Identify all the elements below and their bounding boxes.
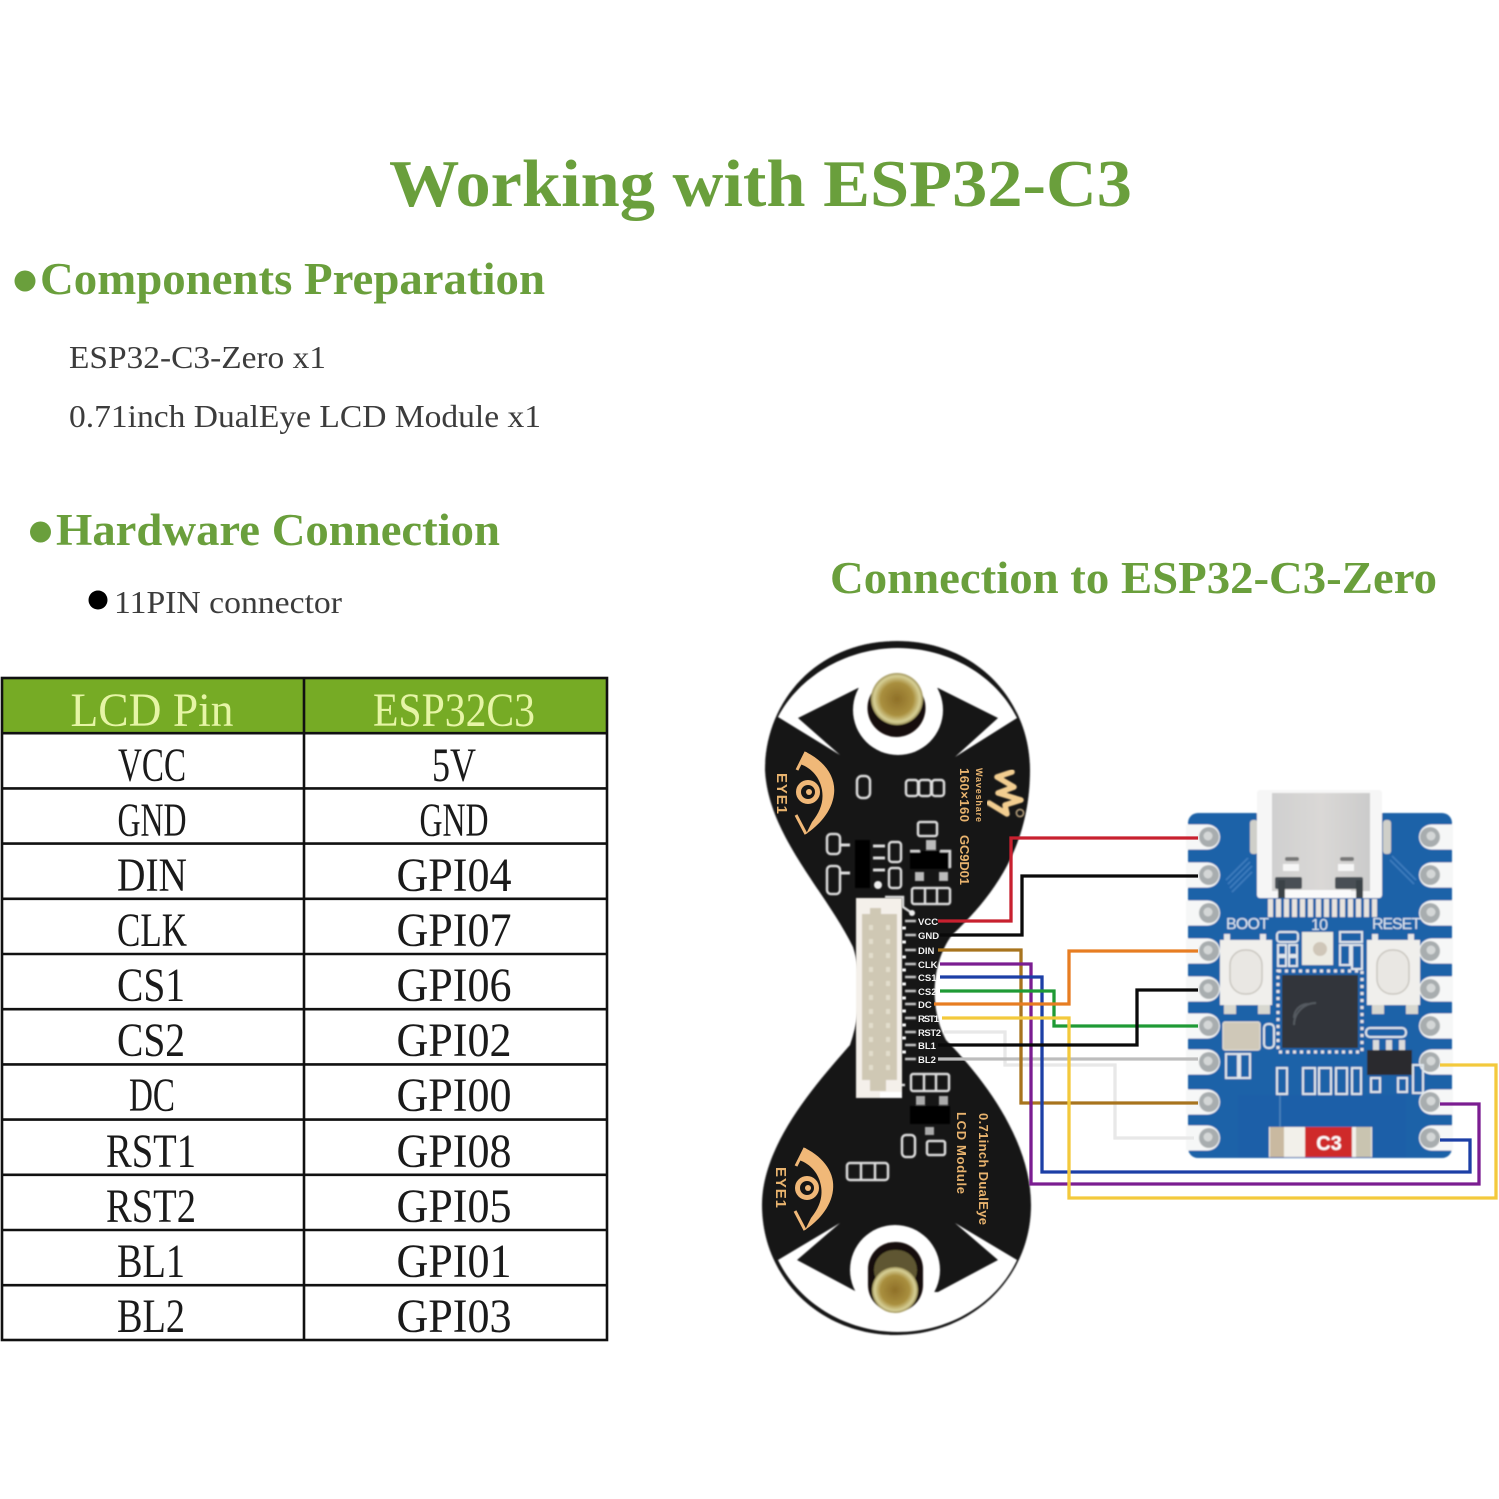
table body text: GPI02 — [396, 1014, 512, 1067]
heading: connection to ESP32-C3-Zero: Connection to ESP32-C3-Zero — [830, 553, 1437, 603]
wire: CS1 — [940, 977, 1470, 1172]
table body text — [106, 739, 512, 1343]
table body text: GPI04 — [396, 849, 512, 902]
table header row: LCD Pin — [70, 684, 234, 737]
text block: component list: ESP32-C3-Zero x1 — [69, 339, 326, 375]
table body text: CS2 — [117, 1014, 185, 1067]
LCD module board — [762, 641, 1031, 1335]
small pcb footprints — [1226, 932, 1423, 1094]
pin labels: GND — [918, 931, 939, 942]
pin labels — [902, 917, 941, 1066]
PCB base — [1188, 813, 1452, 1158]
ESP32-C3 chip — [1278, 971, 1362, 1052]
table body text: CLK — [117, 904, 187, 957]
table body text: DIN — [117, 849, 187, 902]
table body text: GPI08 — [396, 1125, 512, 1178]
USB-C connector — [1250, 790, 1391, 908]
icon: bottom eye logo — [795, 1148, 833, 1230]
table body text: GPI01 — [396, 1235, 512, 1288]
top screw — [868, 673, 926, 737]
label: EYE1 top: EYE1 — [773, 773, 790, 814]
silk labels: BOOT — [1226, 916, 1269, 933]
pin labels: CS2 — [918, 987, 936, 998]
pin labels: BL1 — [918, 1041, 937, 1052]
table: pin mapping — [2, 678, 607, 1343]
antenna area — [1238, 1095, 1406, 1158]
table body text: RST2 — [106, 1180, 196, 1233]
BOOT button — [1220, 934, 1272, 1014]
board footprints — [827, 776, 950, 1180]
heading: hardware connection: Hardware Connection — [56, 505, 500, 555]
table body text: GPI06 — [396, 959, 512, 1012]
table header row — [2, 678, 607, 737]
text block: component list — [69, 339, 541, 434]
pin labels: RST2 — [918, 1028, 941, 1039]
silk labels: 10 — [1311, 917, 1328, 934]
pin labels: DC — [918, 1000, 932, 1011]
wire: RST2 — [944, 1032, 1194, 1138]
wire: DIN — [938, 950, 1198, 1103]
connection wires — [934, 838, 1496, 1198]
board outline — [762, 641, 1031, 1335]
wire: GND — [940, 876, 1198, 935]
silk labels — [1226, 916, 1421, 934]
wire: CS2 — [940, 991, 1198, 1026]
22-pin connector — [856, 898, 902, 1098]
pin labels: BL2 — [918, 1055, 936, 1066]
wire: BL1 — [938, 990, 1198, 1045]
wire: DC — [934, 951, 1198, 1004]
antenna area: C3 — [1316, 1133, 1342, 1155]
board silk text: 160×160 — [957, 768, 972, 822]
text block: 11PIN connector: 11PIN connector — [114, 584, 342, 620]
table body text: CS1 — [117, 959, 185, 1012]
table body text: 5V — [432, 739, 476, 792]
wire: BL2 — [938, 1057, 1198, 1061]
ESP32-C3-Zero board — [1186, 790, 1453, 1158]
board silk text — [954, 768, 991, 1225]
wire: CLK — [940, 964, 1479, 1184]
pin labels: CLK — [918, 960, 938, 971]
label: EYE1 bottom: EYE1 — [772, 1167, 789, 1208]
side pads — [1186, 824, 1453, 1150]
crystal — [1223, 1022, 1260, 1050]
table body text: GPI07 — [396, 904, 512, 957]
board silk text: LCD Module — [954, 1112, 969, 1194]
board silk text: GC9D01 — [957, 835, 972, 885]
table body text: RST1 — [106, 1125, 196, 1178]
pin labels: CS1 — [918, 973, 937, 984]
table body text: GPI00 — [396, 1069, 512, 1122]
pin labels: RST1 — [918, 1014, 940, 1025]
board silk text: 0.71inch DualEye — [976, 1113, 991, 1225]
table body text: GPI03 — [396, 1290, 512, 1343]
wire: RST1 — [942, 1018, 1496, 1198]
table body text: GND — [420, 794, 488, 847]
SOT regulator — [1367, 1040, 1412, 1075]
table header row: ESP32C3 — [373, 684, 535, 737]
silk labels: RESET — [1372, 916, 1421, 933]
table body text: GPI05 — [396, 1180, 512, 1233]
text block: component list: 0.71inch DualEye LCD Module x1 — [69, 398, 541, 434]
bottom eye white shape — [778, 1223, 1017, 1332]
wire: VCC to 5V — [938, 838, 1198, 921]
RESET button — [1367, 934, 1420, 1014]
pcb traces — [1226, 856, 1416, 892]
table body text: DC — [129, 1069, 175, 1122]
bottom screw — [868, 1242, 923, 1313]
icon: Waveshare logo — [989, 772, 1024, 817]
table body text: VCC — [118, 739, 186, 792]
board silk text: Waveshare — [974, 768, 984, 822]
table body text: BL1 — [117, 1235, 185, 1288]
heading: components preparation: Components Preparation — [40, 254, 545, 304]
icon: top eye logo — [796, 752, 834, 834]
table body text: GND — [118, 794, 186, 847]
table body text: BL2 — [117, 1290, 185, 1343]
pin labels: VCC — [918, 917, 938, 928]
pin labels: DIN — [918, 946, 934, 957]
RGB LED — [1302, 932, 1333, 965]
top eye white shape — [778, 648, 1017, 757]
title: Working with ESP32-C3 — [389, 147, 1132, 221]
